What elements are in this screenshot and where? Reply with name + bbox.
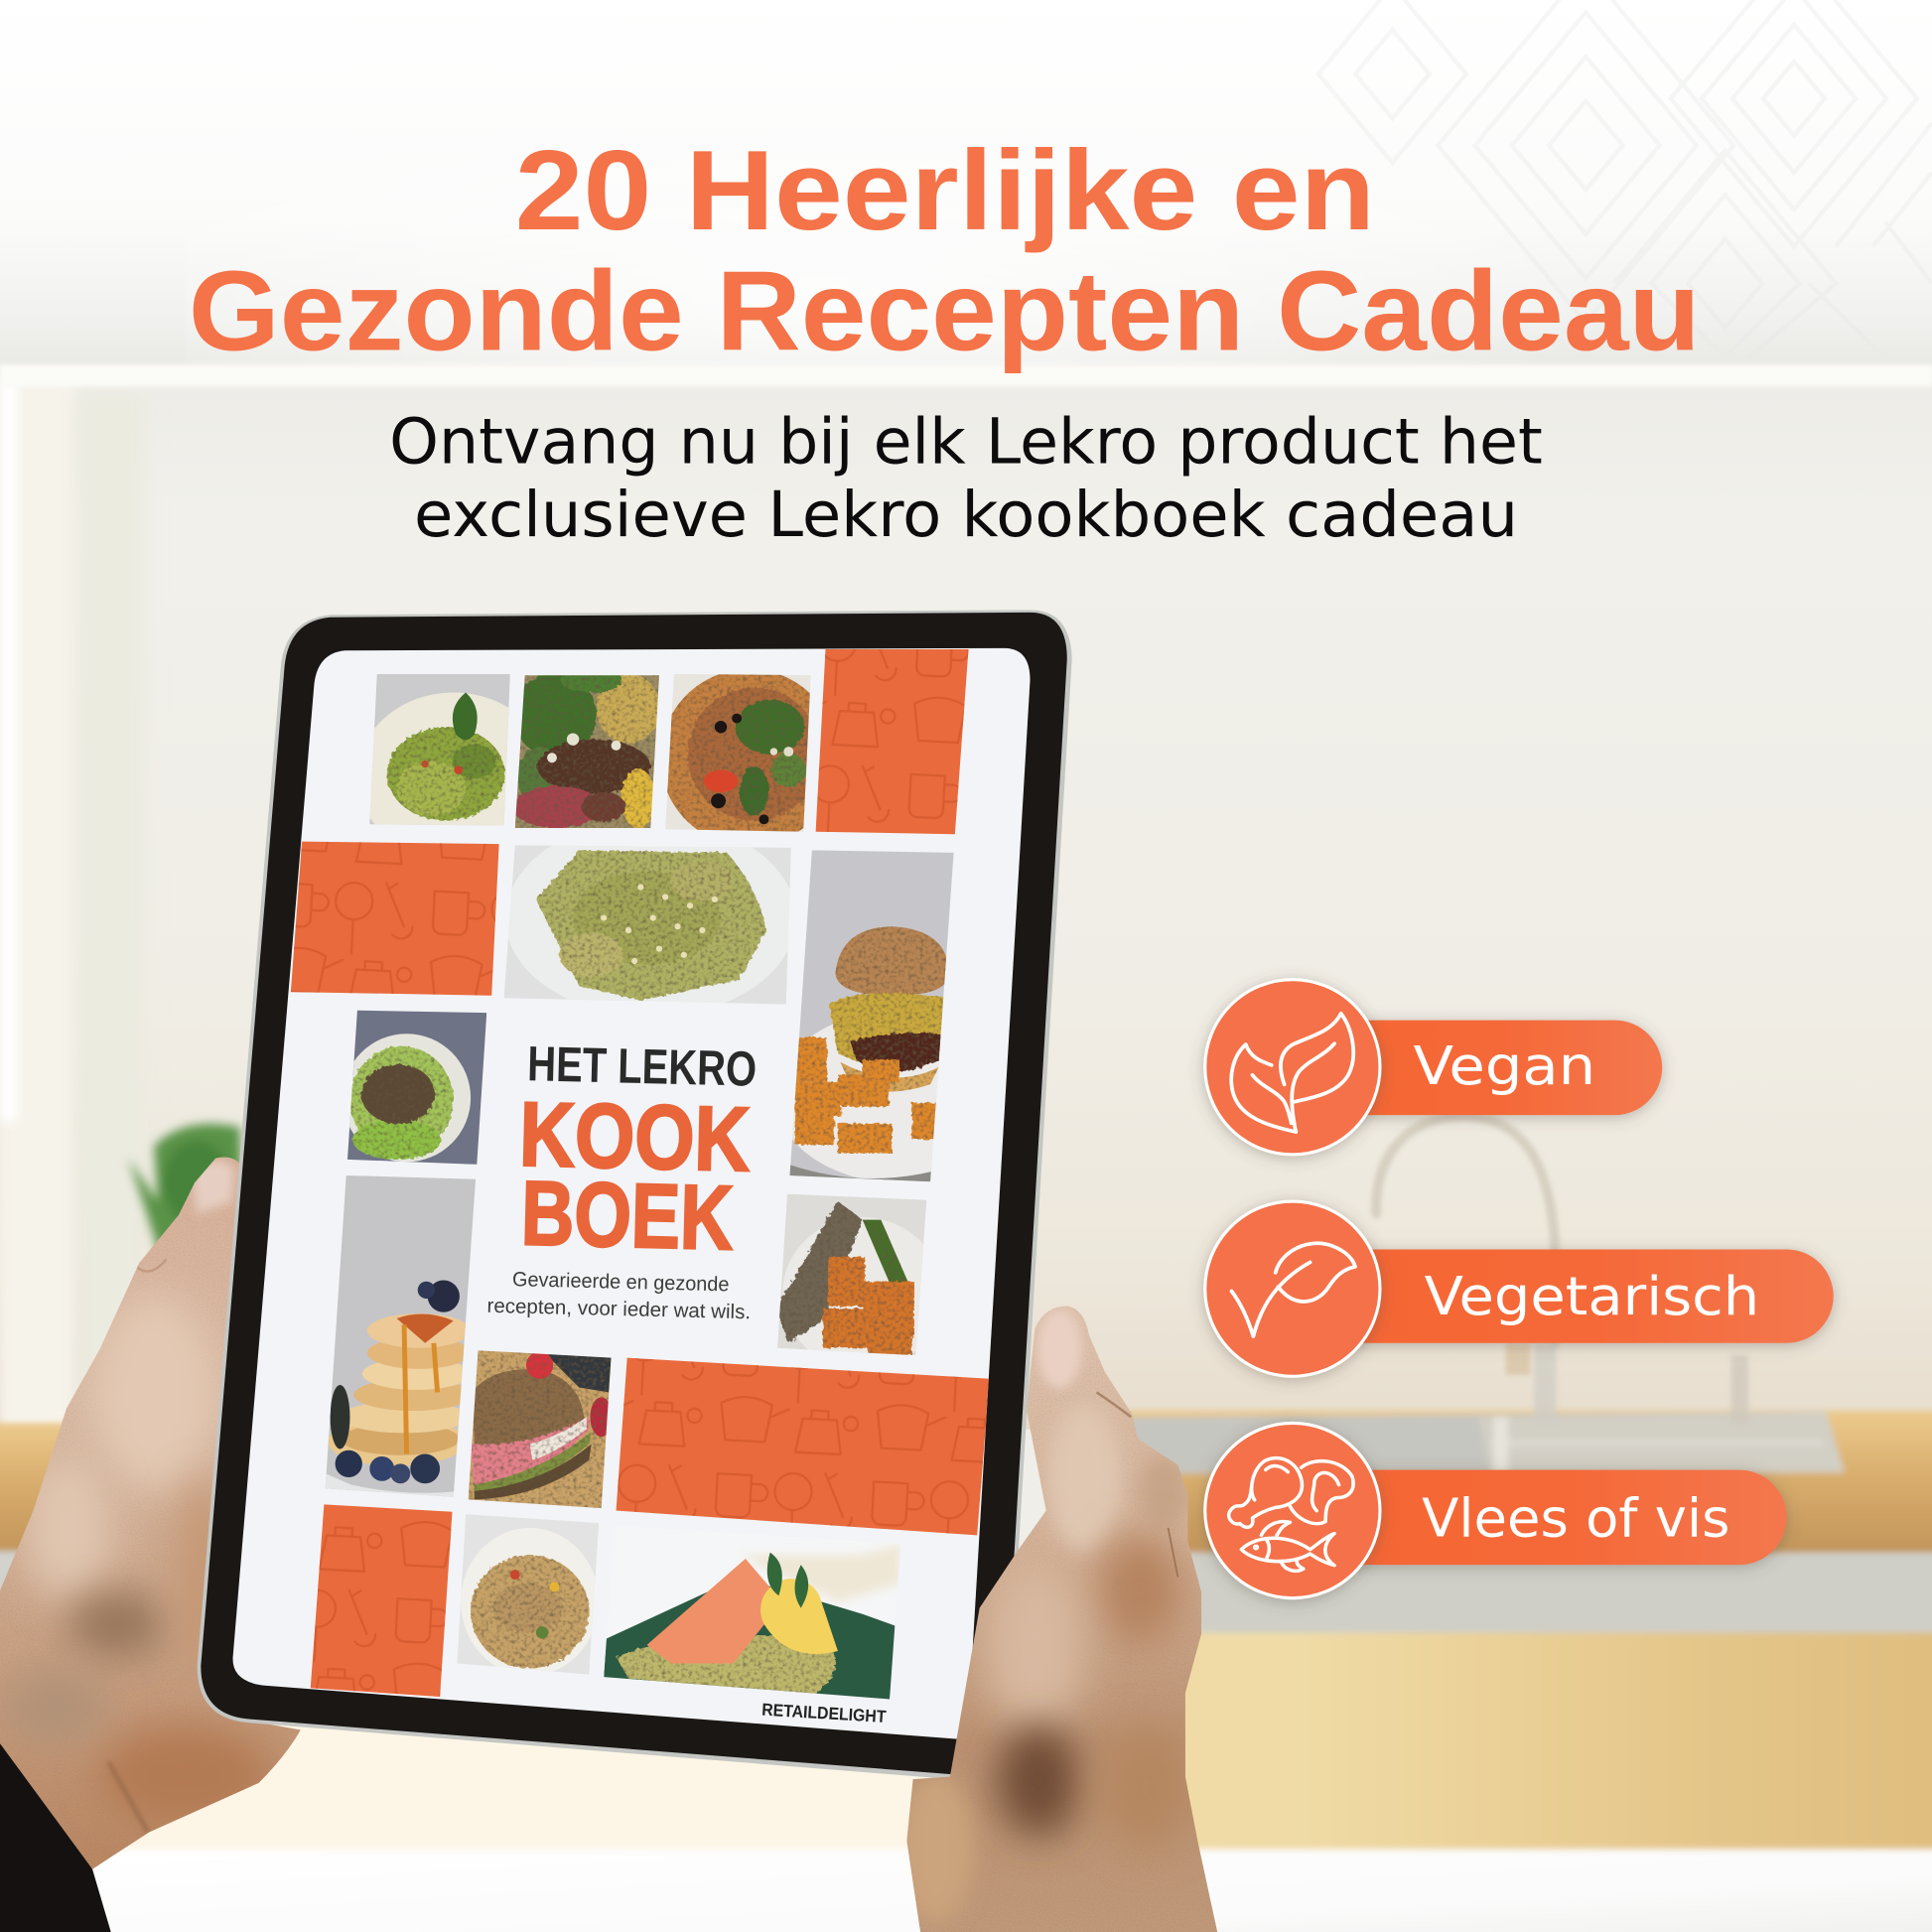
label: Vegan (1414, 1035, 1595, 1097)
photo: creamy pasta with pine nuts (504, 846, 790, 1005)
subtitle (389, 405, 1543, 551)
tablet screen: cover (221, 640, 1047, 1749)
right hand (899, 1294, 1232, 1932)
photo: salmon plate (602, 1523, 903, 1703)
photo: burger with sweet potato (776, 848, 1023, 1186)
right counter (1121, 1411, 1932, 1554)
hand shape (899, 1294, 1232, 1932)
title (189, 128, 1701, 374)
photo: sandwich (462, 1345, 617, 1512)
photo: pizza (665, 674, 810, 832)
photo: noodles (454, 1511, 604, 1678)
label: Vlees of vis (1422, 1487, 1729, 1550)
icon circle (1205, 1201, 1380, 1376)
icon circle (1205, 980, 1380, 1155)
cover title: BOEK (520, 1163, 735, 1269)
tablet frame (198, 610, 1072, 1789)
cover title (516, 1084, 752, 1270)
lower cabinet (1059, 1553, 1932, 1634)
left counter (0, 1423, 86, 1552)
floor (0, 1850, 1932, 1932)
cover tagline: recepten, voor ieder wat wils. (486, 1295, 751, 1323)
title: 20 Heerlijke en (515, 128, 1375, 254)
faucet (1376, 1116, 1748, 1423)
plant (128, 1124, 244, 1312)
wooden drawer (73, 1632, 1932, 1852)
pill (1307, 1470, 1787, 1565)
publisher mark: RETAILDELIGHT (761, 1700, 887, 1726)
orange pattern tiles (291, 649, 990, 1697)
tablet (198, 610, 1072, 1789)
wall (0, 382, 1932, 1430)
upper cabinet (0, 0, 1932, 364)
hand shape (0, 1146, 308, 1885)
chevron pattern (1318, 0, 1932, 357)
cabinet lower white strip (0, 364, 1932, 387)
cover heading: HET LEKRO (527, 1035, 758, 1097)
icon circle (1205, 1423, 1380, 1598)
label: Vegetarisch (1425, 1265, 1759, 1327)
subtitle: Ontvang nu bij elk Lekro product het (389, 405, 1543, 479)
cover tagline: Gevarieerde en gezonde (512, 1268, 730, 1296)
icon: meat and fish (1229, 1458, 1353, 1571)
photo: bowl (343, 1008, 490, 1169)
photo: pancakes (321, 1171, 481, 1503)
cover text (486, 1035, 758, 1323)
photo: salmon with sweet potato (773, 1190, 942, 1370)
badge: Vegan (1205, 980, 1662, 1155)
title: Gezonde Recepten Cadeau (189, 248, 1701, 374)
pill (1307, 1249, 1834, 1343)
cover tagline (486, 1267, 752, 1323)
subtitle: exclusieve Lekro kookboek cadeau (414, 478, 1518, 551)
photo: pesto pasta (369, 674, 510, 826)
lower kitchen (0, 1411, 1932, 1932)
badge: Vegetarisch (1205, 1201, 1834, 1376)
sleeve (0, 1743, 111, 1932)
photo: steak salad (514, 675, 659, 828)
badge: Vlees of vis (1205, 1423, 1787, 1598)
pill (1307, 1021, 1662, 1115)
cover title: KOOK (518, 1084, 752, 1190)
left hand (0, 1146, 308, 1932)
sink (1128, 1412, 1845, 1473)
icon: leaf check (1232, 1243, 1355, 1336)
icon: leaves (1231, 1014, 1353, 1132)
